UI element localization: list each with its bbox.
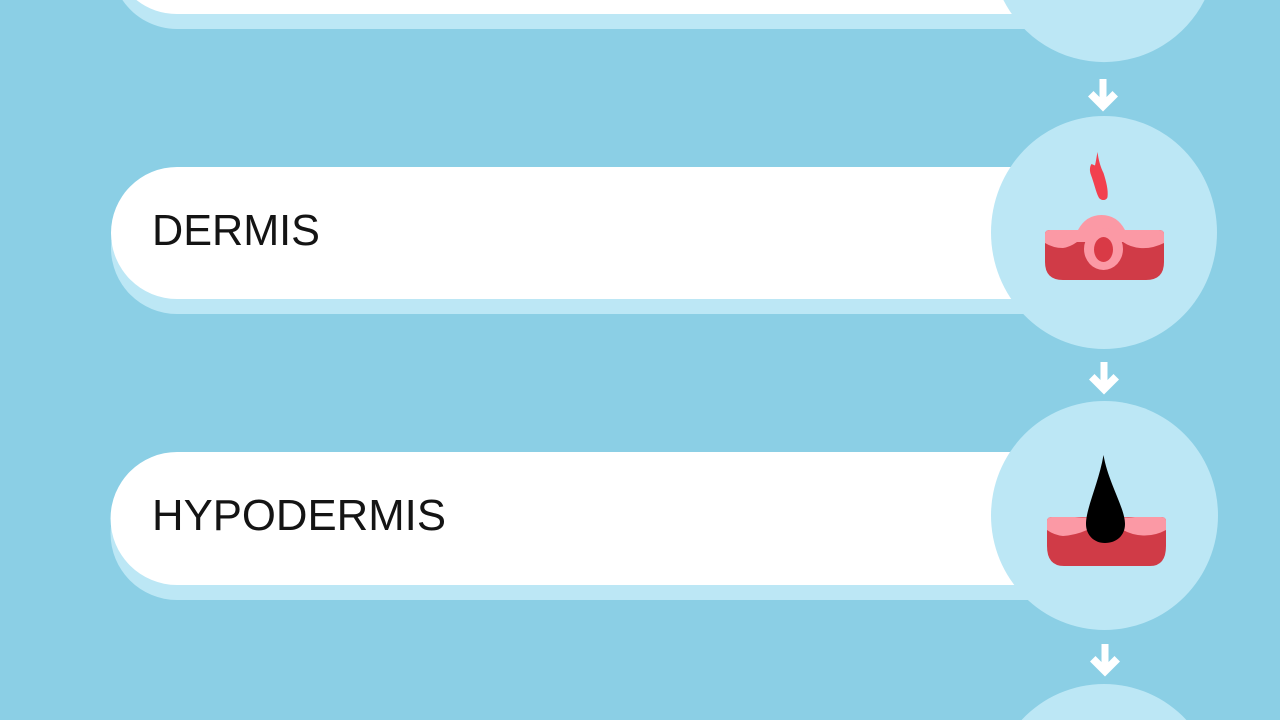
icon: black drop xyxy=(1086,455,1125,543)
icon: top circle (cropped) xyxy=(1003,0,1205,62)
icon: follicle ring xyxy=(1084,228,1123,270)
panel: dermis pill xyxy=(111,167,1040,314)
heading: dermis: DERMIS xyxy=(152,206,320,255)
arrow: top circle to dermis xyxy=(1088,79,1118,112)
heading: hypodermis: HYPODERMIS xyxy=(152,491,446,540)
icon: red flame xyxy=(1090,152,1108,200)
icon: bottom circle (cropped) xyxy=(1022,684,1186,720)
arrow: hypodermis to next xyxy=(1090,644,1120,676)
icon: skin surface xyxy=(1045,215,1164,248)
icon: dermis circle with skin cross-section xyxy=(991,116,1217,349)
panel: top layer pill (cropped) xyxy=(122,0,1040,29)
icon: hypodermis circle with black drop xyxy=(991,401,1218,630)
icon: skin base xyxy=(1047,517,1166,566)
icon: skin base xyxy=(1045,230,1164,280)
icon: skin surface xyxy=(1047,517,1166,536)
panel: hypodermis pill xyxy=(111,452,1040,600)
arrow: dermis to hypodermis xyxy=(1089,362,1119,394)
